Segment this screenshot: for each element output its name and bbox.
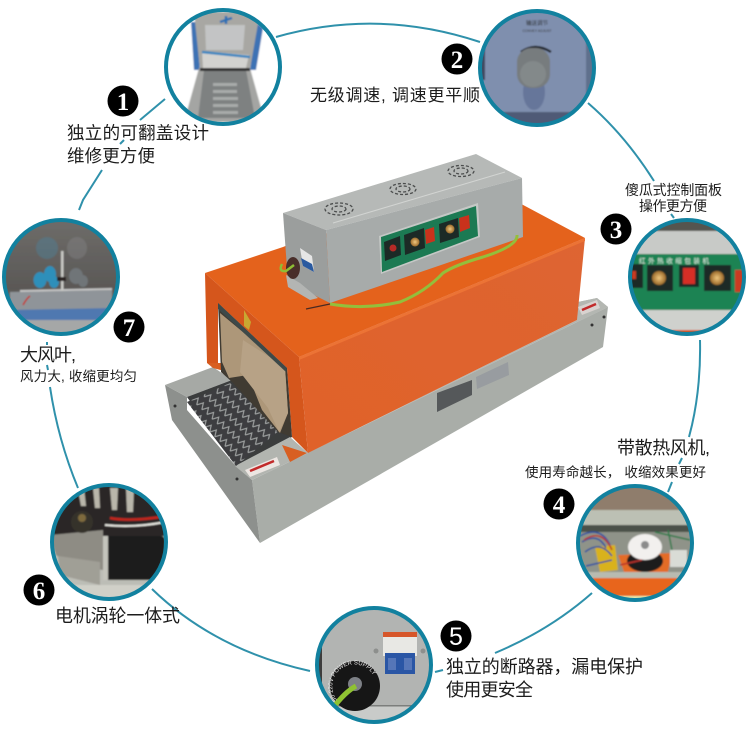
callout 6: worm gear motor (24, 484, 180, 626)
badge 2 (442, 44, 472, 74)
badge 2: 2 (451, 47, 463, 74)
inset photo 5 (319, 610, 429, 720)
ring 7 (4, 220, 118, 334)
text 3: 操作更方便 (639, 198, 707, 214)
text 3 (625, 182, 722, 214)
text 1 (67, 123, 209, 166)
text 4: 使用寿命越长， 收缩效果更好 (525, 464, 706, 480)
inset photo 5: 50 220V POWER SUPPLY (328, 660, 377, 702)
connecting ring lines (47, 24, 700, 672)
text 5: 独立的断路器，漏电保护 (446, 657, 643, 677)
badge 5: 5 (449, 623, 463, 651)
text 7: 风力大, 收缩更均匀 (20, 369, 137, 384)
tunnel curtain (218, 303, 292, 437)
callout 3: control panel (600, 182, 745, 338)
text 7 (20, 345, 137, 384)
ring 6 (52, 485, 166, 599)
text 7: 大风叶, (20, 345, 76, 365)
callout 5: circuit breaker (315, 606, 643, 724)
inset photo 2 (482, 13, 592, 123)
machine base (165, 298, 608, 543)
badge 4 (544, 488, 574, 520)
text 4 (525, 438, 710, 480)
central machine: heat shrink tunnel (165, 154, 608, 543)
callout 7: large fan blade (3, 219, 144, 384)
inset photo 6 (54, 487, 164, 597)
badge 6: 6 (33, 578, 45, 605)
text 3: 傻瓜式控制面板 (625, 182, 722, 198)
ring 1 (166, 10, 280, 124)
badge 3 (600, 214, 632, 244)
ring 2 (480, 11, 594, 125)
inset photo 3: 红外热收缩包装机 (639, 256, 710, 265)
callout 4: cooling fan (525, 438, 710, 602)
badge 4: 4 (553, 492, 566, 519)
base label plates (245, 300, 600, 477)
green ground wire (330, 235, 517, 307)
inset photo 4 (580, 488, 690, 598)
electrical control box (283, 154, 523, 303)
callout 1: flip cover (67, 9, 281, 166)
ring 5 (317, 608, 431, 722)
badge 6 (24, 574, 54, 606)
text 4: 带散热风机, (617, 438, 710, 458)
box vents (325, 166, 474, 215)
inset photo 3 (632, 222, 742, 332)
green control panel (379, 203, 480, 274)
text 5 (446, 657, 643, 700)
ring 4 (578, 486, 692, 600)
text 1: 维修更方便 (67, 146, 155, 166)
text 2: 无级调速, 调速更平顺 (310, 86, 480, 105)
badge 1: 1 (117, 89, 129, 116)
inset photo 7 (6, 222, 116, 332)
text 1: 独立的可翻盖设计 (67, 123, 209, 143)
inset photo 2: CONVEY ADJUST (522, 29, 552, 33)
inset photo 2: 输送调节 (526, 19, 548, 27)
badge 7 (114, 312, 144, 342)
wire end (306, 304, 330, 309)
orange heating tunnel (205, 190, 585, 462)
callout 2: speed knob (310, 10, 595, 126)
badge 3: 3 (610, 217, 622, 244)
conveyor mesh belt (187, 383, 278, 466)
badge 1 (108, 86, 138, 116)
badge 7: 7 (123, 315, 135, 342)
text 5: 使用更安全 (446, 680, 533, 700)
badge 5 (440, 620, 472, 652)
inset photo 1 (187, 12, 264, 122)
text 6: 电机涡轮一体式 (55, 606, 180, 626)
ring 3 (630, 220, 744, 334)
breaker and power inlet on box side (281, 248, 318, 300)
